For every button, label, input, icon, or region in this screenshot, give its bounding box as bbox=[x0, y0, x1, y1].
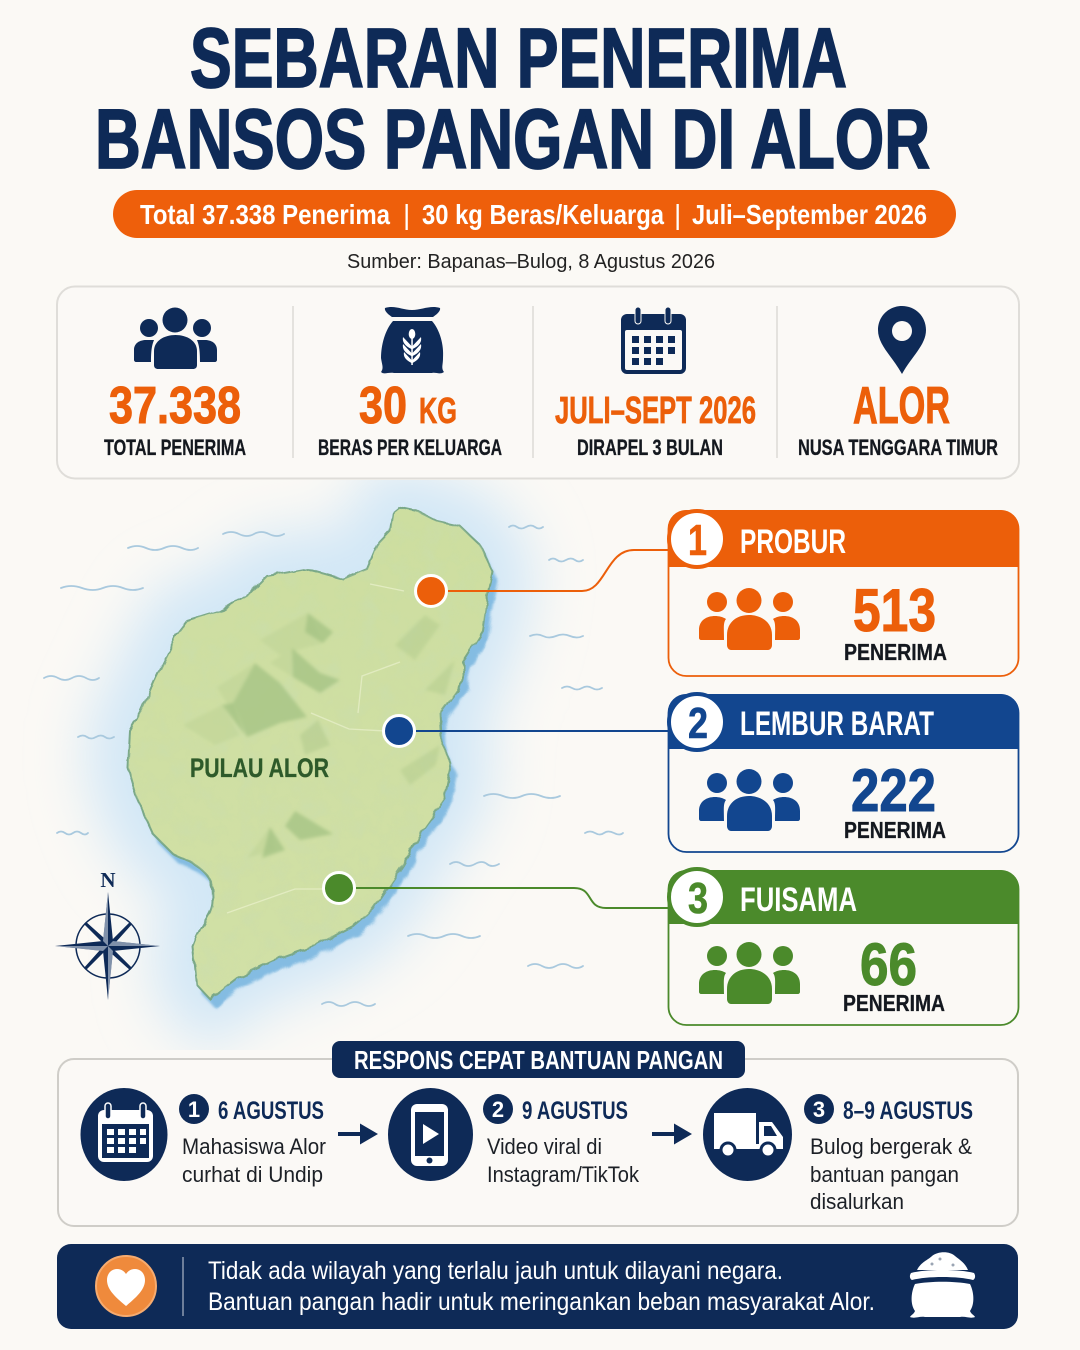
island shadow bbox=[133, 516, 498, 1008]
stat: location: NUSA TENGGARA TIMUR bbox=[798, 435, 998, 460]
island label: PULAU ALOR bbox=[190, 753, 329, 783]
stat: total recipients bbox=[104, 308, 246, 460]
footer banner bbox=[57, 1244, 1018, 1329]
map: Pulau Alor bbox=[44, 500, 623, 1008]
stat: total recipients: 37.338 bbox=[109, 377, 241, 435]
step 2: Instagram/TikTok bbox=[487, 1162, 640, 1187]
marker: Lembur Barat bbox=[384, 716, 414, 746]
panel: Fuisama: 66 bbox=[860, 931, 917, 998]
icon: heart bbox=[96, 1256, 156, 1316]
step 1: 6 AGUSTUS bbox=[218, 1097, 324, 1125]
island land bbox=[120, 500, 500, 1005]
panel: Probur: PROBUR bbox=[740, 523, 846, 561]
stat: total recipients: TOTAL PENERIMA bbox=[104, 435, 246, 460]
icon: rice sack bbox=[910, 1252, 975, 1318]
panel: Lembur Barat: 222 bbox=[851, 757, 936, 824]
roads bbox=[227, 584, 404, 913]
step 3: disalurkan bbox=[810, 1189, 904, 1214]
step 2: Video viral di bbox=[487, 1134, 602, 1159]
panel: Lembur Barat: PENERIMA bbox=[844, 817, 946, 843]
panel: Probur bbox=[668, 510, 1019, 676]
panel: Fuisama: PENERIMA bbox=[843, 990, 945, 1016]
sea glow bbox=[128, 507, 493, 999]
stat: location bbox=[798, 306, 998, 460]
subtitle pill: | bbox=[403, 199, 410, 230]
subtitle pill: 30 kg Beras/Keluarga bbox=[422, 199, 664, 230]
panel: Fuisama: FUISAMA bbox=[740, 881, 857, 919]
connector: Probur bbox=[448, 550, 668, 591]
mountains bbox=[183, 613, 455, 858]
subtitle pill: Total 37.338 Penerima bbox=[140, 199, 390, 230]
panel: key stats bbox=[57, 286, 1019, 478]
source line: Sumber: Bapanas–Bulog, 8 Agustus 2026 bbox=[347, 251, 715, 273]
step 1: Mahasiswa Alor bbox=[182, 1134, 326, 1159]
stat: rice per family: BERAS PER KELUARGA bbox=[318, 435, 502, 460]
arrow bbox=[338, 1127, 374, 1141]
timeline heading bbox=[332, 1041, 745, 1078]
marker: Fuisama bbox=[324, 872, 354, 904]
timeline heading: RESPONS CEPAT BANTUAN PANGAN bbox=[354, 1045, 723, 1075]
stat: rice per family bbox=[318, 307, 502, 460]
title: SEBARAN PENERIMA bbox=[190, 11, 847, 105]
sea waves bbox=[44, 526, 623, 1006]
step 2: 2 bbox=[492, 1097, 504, 1122]
subtitle pill: | bbox=[674, 199, 681, 230]
stat: period: JULI–SEPT 2026 bbox=[555, 390, 756, 432]
step 3: Bulog bergerak & bbox=[810, 1134, 972, 1159]
marker: Probur bbox=[416, 576, 446, 606]
message: Tidak ada wilayah yang terlalu jauh untuk dilayani negara. bbox=[208, 1257, 783, 1285]
connector: Lembur Barat bbox=[416, 730, 668, 732]
panel: Lembur Barat bbox=[668, 694, 1019, 852]
arrow bbox=[652, 1127, 688, 1141]
panel: Lembur Barat: 2 bbox=[688, 699, 708, 748]
step 1: curhat di Undip bbox=[182, 1162, 323, 1187]
step 3: bantuan pangan bbox=[810, 1162, 959, 1187]
stat: location: ALOR bbox=[853, 377, 950, 435]
step 1 bbox=[80, 1088, 326, 1187]
panel: Probur: 513 bbox=[853, 577, 936, 644]
stat: period bbox=[555, 307, 756, 460]
panel: Fuisama bbox=[668, 869, 1019, 1025]
step 3: 8–9 AGUSTUS bbox=[843, 1097, 973, 1125]
panel: timeline bbox=[58, 1041, 1018, 1226]
message: Bantuan pangan hadir untuk meringankan beban masyarakat Alor. bbox=[208, 1288, 875, 1316]
stat: period: DIRAPEL 3 BULAN bbox=[577, 435, 723, 460]
step 3 bbox=[703, 1088, 973, 1214]
subtitle pill: Juli–September 2026 bbox=[692, 199, 927, 230]
compass rose bbox=[55, 868, 160, 1000]
step 1: 1 bbox=[188, 1097, 200, 1122]
stat: rice per family: KG bbox=[419, 390, 457, 431]
step 2 bbox=[388, 1088, 640, 1187]
connector: Fuisama bbox=[356, 888, 668, 908]
step 2: 9 AGUSTUS bbox=[522, 1097, 628, 1125]
step 3: 3 bbox=[813, 1097, 825, 1122]
panel: Lembur Barat: LEMBUR BARAT bbox=[740, 705, 934, 743]
compass rose: N bbox=[100, 868, 116, 892]
panel: Probur: 1 bbox=[688, 516, 707, 565]
panel: Probur: PENERIMA bbox=[844, 639, 947, 665]
panel: Fuisama: 3 bbox=[688, 874, 708, 923]
subtitle pill bbox=[113, 190, 956, 238]
message bbox=[208, 1257, 875, 1316]
title bbox=[95, 11, 930, 186]
stat: rice per family: 30 bbox=[359, 377, 407, 435]
